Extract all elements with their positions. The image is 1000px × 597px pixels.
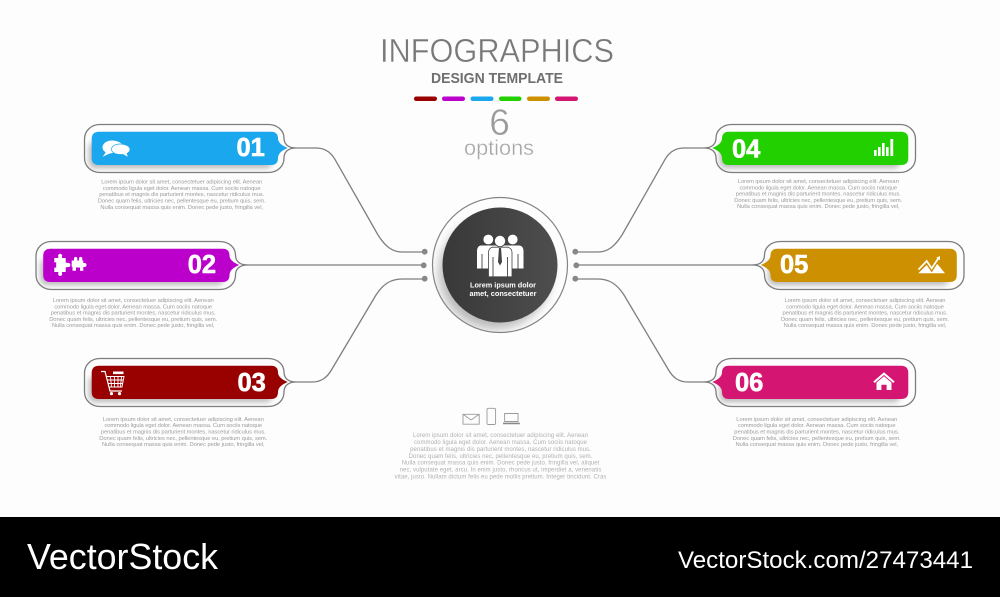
text block 02: Donec quam felis, ultricies nec, pellentesque eu, pretium quis, sem.	[49, 317, 218, 323]
hub caption: amet, consectetuer	[470, 289, 537, 298]
icon: puzzle pieces	[54, 254, 86, 276]
text block 04: penatibus et magnis dis parturient montes, nascetur ridiculus mus.	[736, 192, 901, 198]
text block 06: Lorem ipsum dolor sit amet, consectetuer adipiscing elit. Aenean	[736, 417, 897, 423]
panel: option 02	[36, 242, 248, 329]
text block 06: commodo ligula eget dolor. Aenean massa. Cum sociis natoque	[738, 423, 896, 429]
icon: chat bubbles	[102, 140, 130, 158]
text block 02: Nulla consequat massa quis enim. Donec pede justo, fringilla vel,	[52, 323, 215, 329]
panel: option 01	[84, 124, 296, 211]
text block 04: commodo ligula eget dolor. Aenean massa. Cum sociis natoque	[739, 185, 897, 191]
text block 05: Donec quam felis, ultricies nec, pellentesque eu, pretium quis, sem.	[781, 317, 949, 323]
central hub	[432, 198, 568, 332]
number 02: 02	[188, 251, 216, 279]
text block: bottom centre: penatibus et magnis dis parturient montes, nascetur ridiculus mus.	[410, 447, 591, 453]
text block 04: Lorem ipsum dolor sit amet, consectetuer adipiscing elit. Aenean	[738, 179, 899, 185]
text block 01: penatibus et magnis dis parturient montes, nascetur ridiculus mus.	[99, 192, 265, 198]
colour dash row	[414, 96, 578, 101]
hub caption: Lorem ipsum dolor	[470, 280, 536, 290]
number 01: 01	[236, 134, 265, 162]
text block 06: Donec quam felis, ultricies nec, pellentesque eu, pretium quis, sem.	[733, 436, 901, 442]
panel: option 05	[752, 242, 964, 329]
footer brand: VectorStock	[27, 536, 219, 577]
text block 06: Nulla consequat massa quis enim. Donec pede justo, fringilla vel,	[735, 442, 899, 448]
text block 05: Nulla consequat massa quis enim. Donec pede justo, fringilla vel,	[784, 323, 947, 329]
text block: bottom centre	[395, 433, 606, 481]
text block 05	[781, 298, 949, 329]
footer bar	[0, 517, 1000, 597]
text block: bottom centre: vitae, justo. Nullam dictum felis eu pede mollis pretium. Integer tincidunt. Cras	[395, 475, 606, 481]
icons: envelope, phone, laptop	[463, 408, 520, 424]
text block 03: Lorem ipsum dolor sit amet, consectetuer adipiscing elit. Aenean	[103, 417, 264, 423]
icon: house	[873, 372, 895, 390]
text block 03: Donec quam felis, ultricies nec, pellentesque eu, pretium quis, sem.	[99, 436, 268, 442]
text block 04	[734, 179, 903, 210]
text block 03	[99, 417, 268, 448]
hub caption	[470, 280, 537, 298]
text block 05: commodo ligula eget dolor. Aenean massa. Cum sociis natoque	[786, 304, 944, 310]
connector lines	[247, 148, 753, 382]
connector dots	[421, 249, 579, 282]
icon: bar chart	[874, 139, 893, 156]
number 04: 04	[732, 136, 761, 164]
panel: option 06	[704, 358, 916, 448]
text block 02: penatibus et magnis dis parturient montes, nascetur ridiculus mus.	[51, 311, 216, 317]
text block: bottom centre: Donec quam felis, ultricies nec, pellentesque eu, pretium quis, sem.	[409, 454, 593, 460]
text block 02: commodo ligula eget dolor. Aenean massa. Cum sociis natoque	[54, 304, 212, 310]
number 06: 06	[735, 369, 763, 397]
text block 06: penatibus et magnis dis parturient montes, nascetur ridiculus mus.	[734, 430, 900, 436]
text block 01: Donec quam felis, ultricies nec, pellentesque eu, pretium quis, sem.	[98, 198, 266, 204]
subtitle: DESIGN TEMPLATE	[431, 70, 563, 87]
text block 01: Nulla consequat massa quis enim. Donec pede justo, fringilla vel,	[100, 205, 263, 211]
text block 03: commodo ligula eget dolor. Aenean massa. Cum sociis natoque	[104, 423, 262, 429]
text block 01: commodo ligula eget dolor. Aenean massa. Cum sociis natoque	[103, 186, 261, 192]
text block 01	[98, 180, 266, 211]
text block 01: Lorem ipsum dolor sit amet, consectetuer adipiscing elit. Aenean	[101, 180, 262, 186]
big number 6: 6	[489, 102, 510, 143]
icon: shopping cart	[101, 372, 124, 395]
number 03: 03	[238, 369, 266, 397]
panel: option 03	[84, 358, 296, 448]
text block 05: penatibus et magnis dis parturient montes, nascetur ridiculus mus.	[782, 311, 948, 317]
text block 06	[733, 417, 901, 448]
text block 04: Donec quam felis, ultricies nec, pellentesque eu, pretium quis, sem.	[734, 198, 903, 204]
text block: bottom centre: Lorem ipsum dolor sit amet, consectetuer adipiscing elit. Aenean	[413, 433, 588, 439]
text block 02: Lorem ipsum dolor sit amet, consectetuer adipiscing elit. Aenean	[53, 298, 214, 304]
icon: mountain trend	[918, 256, 945, 273]
text block 02	[49, 298, 218, 329]
panel: option 04	[704, 124, 916, 210]
text block: bottom centre: nec, vulputate eget, arcu. In enim justo, rhoncus ut, imperdiet a, venenatis	[400, 468, 601, 474]
text block: bottom centre: commodo ligula eget dolor. Aenean massa. Cum sociis natoque	[414, 440, 588, 446]
text block: bottom centre: Nulla consequat massa quis enim. Donec pede justo, fringilla vel, aliquet	[402, 461, 600, 467]
text block 04: Nulla consequat massa quis enim. Donec pede justo, fringilla vel,	[737, 204, 900, 210]
icon: team of people	[477, 235, 524, 277]
options label: options	[464, 137, 534, 160]
footer image id: VectorStock.com/27473441	[678, 547, 973, 574]
title: INFOGRAPHICS	[380, 33, 614, 70]
text block 05: Lorem ipsum dolor sit amet, consectetuer adipiscing elit. Aenean	[784, 298, 946, 304]
text block 03: penatibus et magnis dis parturient montes, nascetur ridiculus mus.	[101, 430, 266, 436]
number 05: 05	[780, 251, 808, 279]
text block 03: Nulla consequat massa quis enim. Donec pede justo, fringilla vel,	[102, 442, 265, 448]
